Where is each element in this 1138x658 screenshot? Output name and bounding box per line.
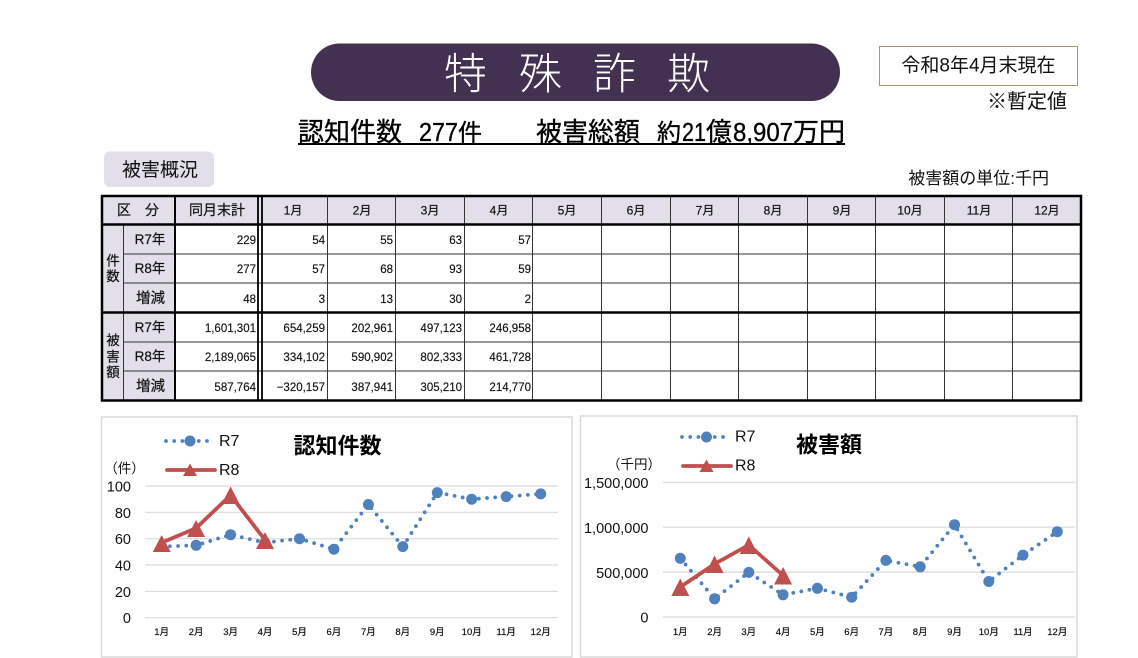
row: count R7: 63 — [449, 235, 462, 247]
x axis months: damage: 9月 — [947, 627, 962, 638]
x axis months: cases — [154, 627, 551, 638]
x axis months: damage: 1月 — [673, 627, 688, 638]
x axis months: cases: 2月 — [189, 627, 203, 638]
headline totals: 件 — [458, 120, 482, 147]
table header row: 9月 — [833, 204, 851, 218]
chart panel: damage amount — [580, 416, 1077, 657]
legend: damage: R8 — [735, 458, 756, 474]
headline totals: 8,907 — [733, 117, 793, 147]
line series R8: damage — [671, 536, 792, 596]
section label: 被害概況 — [122, 159, 198, 181]
row: count R8: 93 — [449, 264, 462, 276]
table header row: 5月 — [558, 204, 576, 218]
gridlines and y axis: cases — [107, 480, 558, 627]
legend: cases — [166, 433, 240, 479]
row group label: count: 数 — [106, 269, 120, 284]
row: damage change — [136, 378, 531, 395]
row: damage change: −320,157 — [277, 382, 325, 394]
x axis months: damage: 4月 — [776, 627, 790, 638]
row: damage R7 — [135, 320, 531, 335]
table header row: 8月 — [764, 204, 782, 218]
row: count R8: 59 — [518, 264, 531, 276]
x axis months: cases: 9月 — [430, 627, 445, 638]
line series R7: cases — [162, 487, 546, 555]
row: damage R8: 334,102 — [283, 352, 325, 364]
row: count change: 30 — [449, 294, 462, 306]
table header row: 同月末計 — [189, 202, 245, 218]
table header row: 4月 — [490, 204, 508, 218]
gridlines and y axis: cases: 0 — [123, 611, 131, 627]
summary table — [102, 196, 1081, 400]
x axis months: cases: 11月 — [497, 627, 516, 638]
x axis months: damage: 8月 — [913, 627, 928, 638]
chart panel: recognised cases — [102, 417, 572, 657]
table header row: 2月 — [353, 204, 371, 218]
row: count R7: 55 — [380, 235, 393, 247]
x axis months: cases: 12月 — [531, 627, 551, 638]
row: damage R7: 246,958 — [489, 323, 531, 335]
headline totals: 21 — [682, 117, 706, 147]
gridlines and y axis: damage: 500,000 — [596, 566, 648, 582]
row: count R8: 57 — [312, 264, 325, 276]
row group label: damage: 被 — [106, 333, 120, 348]
date box: 令和8年4月末現在 — [901, 54, 1056, 76]
table header row: 10月 — [897, 204, 923, 218]
headline totals: 認知件数 — [298, 117, 402, 147]
legend: damage — [682, 428, 756, 474]
x axis months: cases: 10月 — [462, 627, 482, 638]
line series R8: cases — [153, 486, 274, 552]
legend: cases: R8 — [219, 462, 240, 479]
row: damage R8 — [135, 349, 531, 364]
row: count change: 48 — [243, 294, 256, 306]
table header row: 区 分 — [117, 202, 159, 218]
row: damage change: 587,764 — [214, 382, 257, 394]
headline totals — [298, 117, 845, 147]
legend: cases: R7 — [219, 433, 240, 450]
x axis months: cases: 3月 — [223, 627, 238, 638]
unit label: damage: （千円） — [607, 457, 661, 472]
row: count R7: 229 — [237, 235, 256, 247]
headline totals: 万円 — [793, 117, 845, 147]
x axis months: cases: 5月 — [292, 627, 307, 638]
table header row: 11月 — [967, 204, 991, 218]
row: count change: 2 — [525, 294, 531, 306]
table header row: 6月 — [627, 204, 645, 218]
table header row — [117, 202, 1060, 218]
row group label: count: 件 — [106, 254, 120, 268]
provisional note: ※暫定値 — [987, 90, 1067, 113]
row: damage R8: R8年 — [135, 349, 165, 364]
x axis months: cases: 1月 — [154, 627, 169, 638]
row: count change: 13 — [380, 294, 393, 306]
row: count R7: 54 — [312, 235, 326, 247]
gridlines and y axis: damage — [584, 476, 1075, 626]
row: count R7 — [135, 232, 531, 247]
x axis months: damage: 10月 — [979, 627, 999, 638]
x axis months: cases: 6月 — [327, 627, 341, 638]
gridlines and y axis: cases: 40 — [115, 558, 131, 574]
row: damage R8: 2,189,065 — [205, 352, 256, 364]
gridlines and y axis: cases: 20 — [115, 585, 131, 601]
row: damage R7: 202,961 — [351, 323, 393, 335]
headline totals: 約 — [657, 120, 681, 147]
chart title: cases: 認知件数 — [293, 434, 382, 458]
table header row: 3月 — [421, 204, 439, 218]
row: count R7: R7年 — [135, 232, 165, 247]
x axis months: cases: 8月 — [395, 627, 410, 638]
row: damage R8: 461,728 — [489, 352, 531, 364]
row: damage R7: 654,259 — [283, 323, 325, 335]
headline totals: 被害総額 — [536, 117, 640, 147]
unit note: 被害額の単位:千円 — [908, 169, 1049, 188]
gridlines and y axis: cases: 80 — [115, 506, 131, 522]
headline totals: 億 — [706, 117, 732, 147]
x axis months: damage: 3月 — [741, 627, 756, 638]
row: damage R8: 802,333 — [420, 352, 462, 364]
row group label: damage — [106, 333, 120, 380]
x axis months: damage: 2月 — [707, 627, 722, 638]
legend: damage: R7 — [735, 428, 756, 446]
line series R7: damage — [675, 519, 1063, 604]
x axis months: damage: 5月 — [810, 627, 825, 638]
date box — [880, 46, 1078, 86]
gridlines and y axis: damage: 1,000,000 — [584, 521, 648, 537]
row: damage R8: 590,902 — [351, 352, 393, 364]
x axis months: damage: 11月 — [1013, 627, 1033, 638]
x axis months: damage — [673, 627, 1067, 638]
row: count R8 — [135, 261, 531, 276]
row: damage change: 増減 — [136, 378, 165, 395]
unit label: cases: （件） — [104, 461, 145, 476]
row: damage R7: 497,123 — [420, 323, 462, 335]
gridlines and y axis: cases: 100 — [107, 480, 131, 496]
title banner — [311, 44, 840, 101]
table header row: 12月 — [1034, 204, 1060, 218]
row: count R8: 68 — [380, 264, 393, 276]
section label — [104, 152, 214, 187]
x axis months: damage: 6月 — [844, 627, 859, 638]
row: count R8: 277 — [237, 264, 256, 276]
x axis months: damage: 12月 — [1047, 627, 1067, 638]
headline totals: 277 — [419, 117, 458, 147]
table header row: 1月 — [284, 204, 302, 218]
row: damage change: 387,941 — [351, 382, 393, 394]
row: damage change: 214,770 — [489, 382, 531, 394]
row group label: damage: 害 — [106, 350, 120, 364]
gridlines and y axis: damage: 1,500,000 — [584, 476, 648, 492]
x axis months: cases: 7月 — [361, 627, 376, 638]
chart title: damage: 被害額 — [796, 432, 862, 458]
row: count R8: R8年 — [135, 261, 165, 276]
table header row: 7月 — [696, 204, 714, 218]
row: count change — [136, 290, 531, 307]
row group label: damage: 額 — [106, 365, 120, 380]
x axis months: cases: 4月 — [258, 627, 272, 638]
row: damage R7: 1,601,301 — [205, 323, 256, 335]
row: damage R7: R7年 — [135, 320, 165, 335]
row: count R7: 57 — [518, 235, 531, 247]
row: damage change: 305,210 — [420, 382, 462, 394]
row: count change: 3 — [319, 294, 325, 306]
row group label: count — [106, 254, 120, 284]
row: count change: 増減 — [136, 290, 165, 307]
gridlines and y axis: damage: 0 — [640, 610, 648, 626]
gridlines and y axis: cases: 60 — [115, 532, 131, 548]
title banner: 特殊詐欺 — [444, 51, 710, 99]
x axis months: damage: 7月 — [879, 627, 893, 638]
